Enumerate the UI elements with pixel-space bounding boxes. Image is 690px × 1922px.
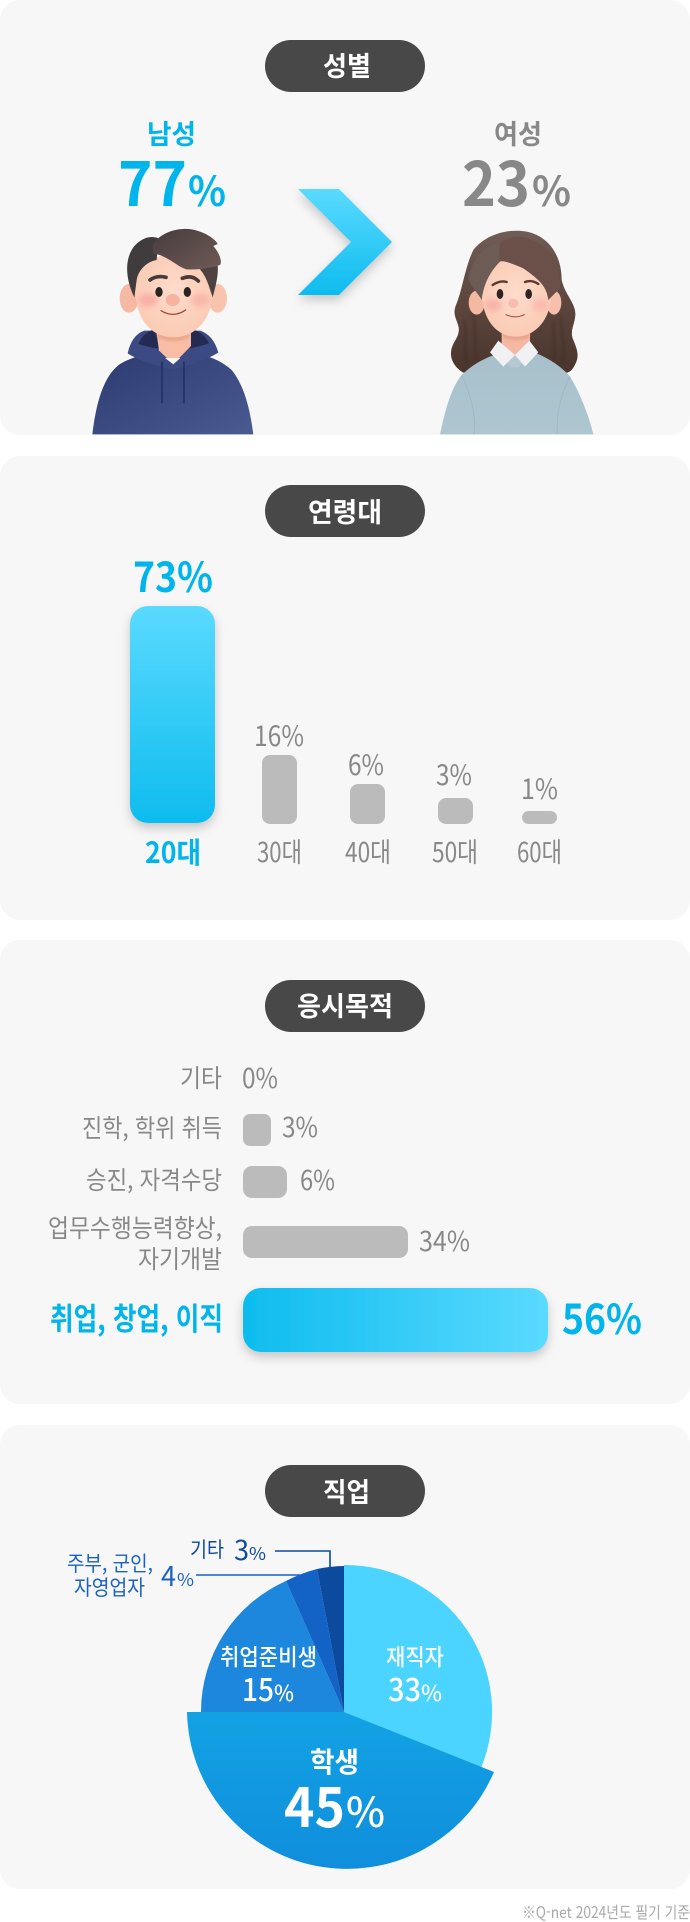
- label: job seeker 15%: 취업준비생: [220, 1638, 317, 1672]
- label: homemaker, military, self-employed 4%: 주부, 군인,: [67, 1548, 153, 1578]
- bar: 30s: [254, 715, 304, 870]
- female label and value: 23: [462, 135, 530, 224]
- bar: 20s: 20대: [145, 830, 201, 872]
- row: promotion: 6%: [300, 1159, 335, 1198]
- bar: 60s: 1%: [521, 768, 558, 808]
- heading: age group: 연령대: [308, 491, 382, 530]
- male label and value: [118, 113, 226, 224]
- panel: gender: [0, 0, 690, 435]
- heading: gender: 성별: [323, 45, 371, 84]
- row: other: 0%: [242, 1057, 278, 1096]
- heading: gender: [265, 40, 425, 92]
- male label and value: %: [188, 158, 226, 218]
- leader line: homemaker etc: [196, 1574, 300, 1576]
- pie chart: [187, 1551, 494, 1869]
- label: other 3%: %: [249, 1540, 266, 1566]
- bar: 40s: [345, 744, 391, 870]
- panel: occupation: [0, 1425, 690, 1889]
- heading: exam purpose: 응시목적: [297, 985, 393, 1024]
- label: employed 33%: 33: [388, 1665, 421, 1710]
- label: employed 33%: %: [421, 1676, 442, 1708]
- heading: occupation: [265, 1465, 425, 1517]
- row: skill development: 업무수행능력향상,: [48, 1209, 222, 1245]
- bar: 40s: 40대: [345, 831, 391, 870]
- bar: 60s: 60대: [517, 831, 562, 870]
- row: employment: 취업, 창업, 이직: [50, 1294, 223, 1339]
- label: student 45%: 학생: [310, 1741, 359, 1781]
- leader line: other: [275, 1551, 330, 1568]
- label: student 45%: %: [346, 1779, 385, 1839]
- label: student 45%: 45: [284, 1764, 345, 1843]
- label: other 3%: [190, 1529, 266, 1568]
- bar: 30s: 30대: [257, 831, 302, 870]
- row: employment: [50, 1286, 642, 1352]
- bar: 50s: 3%: [436, 754, 472, 794]
- label: job seeker 15%: 15: [242, 1665, 274, 1710]
- label: other 3%: 기타: [190, 1534, 224, 1564]
- heading: exam purpose: [265, 980, 425, 1032]
- row: promotion: 승진, 자격수당: [86, 1161, 222, 1197]
- row: skill development: 34%: [419, 1220, 470, 1259]
- row: skill development: [48, 1209, 470, 1276]
- label: homemaker, military, self-employed 4%: [67, 1548, 194, 1602]
- icon: male character: [92, 229, 253, 434]
- label: homemaker, military, self-employed 4%: %: [177, 1566, 194, 1592]
- label: other 3%: 3: [234, 1529, 249, 1568]
- row: skill development: 자기개발: [138, 1240, 222, 1276]
- female label and value: 여성: [494, 113, 542, 152]
- row: other: 기타: [180, 1059, 222, 1095]
- panel: exam purpose: [0, 940, 690, 1404]
- row: employment: 56%: [562, 1286, 642, 1346]
- label: employed 33%: 재직자: [386, 1638, 444, 1672]
- bar: 20s: 73%: [133, 544, 213, 604]
- bar: 60s: [517, 768, 562, 870]
- arrow: chevron greater than: [298, 189, 392, 295]
- label: job seeker 15%: [220, 1638, 317, 1710]
- panel: age group: [0, 456, 690, 920]
- bar: 30s: 16%: [254, 715, 304, 755]
- male label and value: 남성: [147, 113, 196, 152]
- row: further study: 진학, 학위 취득: [82, 1109, 222, 1145]
- row: further study: 3%: [282, 1106, 318, 1145]
- row: other: [180, 1057, 278, 1096]
- label: employed 33%: [386, 1638, 444, 1710]
- female label and value: %: [532, 158, 571, 218]
- label: job seeker 15%: %: [274, 1676, 294, 1708]
- heading: age group: [265, 485, 425, 537]
- row: further study: [82, 1106, 318, 1146]
- heading: occupation: 직업: [323, 1471, 370, 1510]
- row: promotion: [86, 1159, 335, 1198]
- male label and value: 77: [118, 135, 187, 224]
- label: homemaker, military, self-employed 4%: 4: [161, 1555, 176, 1594]
- label: student 45%: [284, 1741, 385, 1843]
- bar: 20s: [130, 544, 215, 872]
- label: homemaker, military, self-employed 4%: 자영업자: [74, 1572, 145, 1602]
- bar: 50s: 50대: [432, 831, 478, 870]
- bar: 50s: [432, 754, 478, 870]
- icon: female character: [440, 231, 593, 434]
- female label and value: [462, 113, 571, 224]
- bar: 40s: 6%: [348, 744, 384, 784]
